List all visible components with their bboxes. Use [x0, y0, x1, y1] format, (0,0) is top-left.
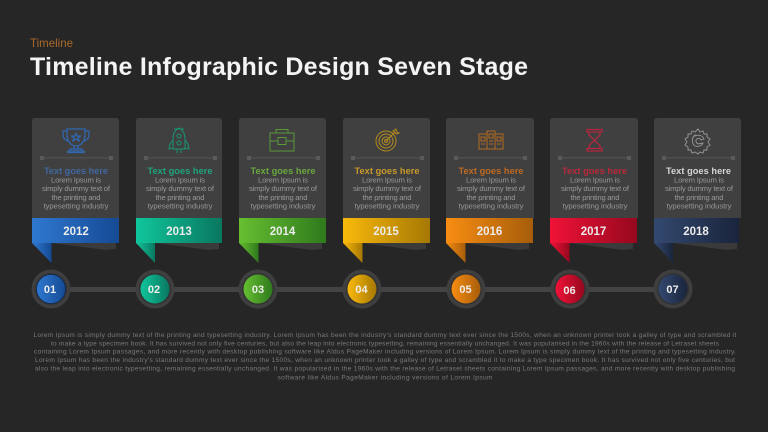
heading: Text goes here	[666, 166, 731, 176]
footer paragraph: software like Aldus PageMaker including versions of Lorem Ipsum	[278, 375, 493, 382]
stage 5: 2016	[446, 118, 534, 263]
body text: typesetting industry	[458, 202, 524, 210]
divider	[351, 156, 424, 160]
ribbon	[550, 218, 637, 243]
connector line	[51, 287, 673, 292]
ribbon shadow	[673, 243, 737, 250]
heading: Text goes here	[354, 166, 420, 176]
heading: Text goes here	[148, 166, 212, 176]
body text	[353, 176, 422, 210]
marker 05: 05	[459, 284, 472, 296]
card panel	[550, 118, 638, 218]
ribbon	[32, 218, 119, 243]
body text: simply dummy text of	[146, 184, 215, 193]
divider	[40, 156, 113, 160]
divider	[144, 156, 217, 160]
stage 4: 2015	[343, 118, 430, 263]
body text: the printing and	[674, 193, 724, 202]
ribbon	[136, 218, 222, 243]
year: 2017	[581, 226, 606, 238]
body text: Lorem Ipsum is	[674, 176, 724, 184]
card panel	[343, 118, 430, 218]
footer paragraph: Lorem Ipsum is simply dummy text of the printing and typesetting industry. Lorem Ipsum has been the industry's standard dummy text ever since the 1500s, when an unknown printer took a galley of type and scrambled it	[34, 332, 737, 339]
ribbon	[446, 218, 533, 243]
marker 04	[342, 270, 382, 308]
icon: buildings	[479, 131, 503, 149]
ribbon tail	[32, 243, 52, 263]
body text: Lorem Ipsum is	[362, 176, 412, 184]
marker 03: 03	[252, 284, 264, 296]
body text	[42, 176, 111, 210]
ribbon	[239, 218, 326, 243]
body text: Lorem Ipsum is	[570, 176, 620, 184]
ribbon tail	[446, 243, 466, 263]
year: 2013	[166, 226, 192, 238]
body text	[665, 176, 734, 210]
body text	[561, 176, 630, 210]
ribbon tail	[343, 243, 362, 263]
body text: the printing and	[156, 193, 204, 202]
body text	[457, 176, 526, 210]
body text: typesetting industry	[148, 202, 213, 210]
card panel	[239, 118, 326, 218]
ribbon	[654, 218, 739, 243]
card panel	[136, 118, 222, 218]
ribbon	[343, 218, 430, 243]
body text: typesetting industry	[354, 202, 420, 210]
icon: gear and wrench	[685, 129, 710, 154]
year: 2016	[477, 226, 502, 238]
marker 02: 02	[148, 284, 160, 296]
body text: Lorem Ipsum is	[258, 176, 308, 184]
ribbon tail	[550, 243, 570, 263]
footer paragraph: to make a type specimen book. It has survived not only five centuries, but also the leap into electronic typesetting, remaining essentially unchanged. It was popularised in the 1960s with the release of Letraset sheets	[51, 340, 720, 347]
heading: Text goes here	[250, 166, 316, 176]
icon: briefcase	[270, 130, 294, 151]
stage 7: 2018	[654, 118, 741, 263]
marker 06	[550, 270, 590, 308]
body text: the printing and	[466, 193, 516, 202]
body text: typesetting industry	[666, 202, 732, 210]
divider	[454, 156, 527, 160]
heading: Text goes here	[44, 166, 108, 176]
divider	[247, 156, 320, 160]
marker 02	[136, 270, 174, 308]
body text: simply dummy text of	[42, 184, 111, 193]
marker 04: 04	[355, 284, 368, 296]
card panel	[32, 118, 119, 218]
body text: simply dummy text of	[457, 184, 526, 193]
body text: the printing and	[258, 193, 308, 202]
title: Timeline Infographic Design Seven Stage	[30, 53, 528, 81]
marker 06: 06	[563, 285, 576, 297]
year: 2014	[270, 226, 296, 238]
year: 2015	[373, 226, 399, 238]
ribbon shadow	[51, 243, 116, 250]
body text	[146, 176, 215, 210]
ribbon tail	[136, 243, 155, 263]
body text: simply dummy text of	[249, 184, 318, 193]
ribbon shadow	[258, 243, 322, 250]
marker 01	[32, 270, 70, 308]
footer paragraph: containing Lorem Ipsum passages, and more recently with desktop publishing software like Aldus PageMaker including versions of Lorem Ipsum. Lorem Ipsum is simply dummy text of the printing and typesetting industry.	[34, 349, 736, 356]
ribbon shadow	[465, 243, 529, 250]
marker 07	[654, 270, 692, 308]
ribbon tail	[239, 243, 258, 263]
ribbon shadow	[155, 243, 219, 250]
body text	[249, 176, 318, 210]
body text: Lorem Ipsum is	[51, 176, 101, 184]
body text: the printing and	[362, 193, 412, 202]
body text: simply dummy text of	[353, 184, 422, 193]
body text: typesetting industry	[562, 202, 628, 210]
body text: simply dummy text of	[665, 184, 734, 193]
stage 6: 2017	[550, 118, 638, 263]
footer paragraph: Lorem Ipsum has been the industry's standard dummy text ever since the 1500s, when an unknown printer took a galley of type and scrambled it to make a type specimen book. It has survived not only five centuries, but	[35, 357, 735, 364]
year: 2018	[683, 226, 709, 238]
body text: Lorem Ipsum is	[155, 176, 205, 184]
ribbon shadow	[362, 243, 426, 250]
body text: Lorem Ipsum is	[466, 176, 516, 184]
marker 03	[238, 270, 278, 308]
body text: the printing and	[570, 193, 620, 202]
divider	[558, 156, 631, 160]
icon: target	[376, 129, 399, 151]
ribbon shadow	[569, 243, 633, 250]
stage 3: 2014	[239, 118, 326, 263]
card panel	[654, 118, 741, 218]
footer paragraph	[34, 332, 737, 382]
footer paragraph: also the leap into electronic typesetting, remaining essentially unchanged. It was popularised in the 1960s with the release of Letraset sheets containing Lorem Ipsum passages, and more recently with desktop publishing	[35, 365, 735, 372]
marker 07: 07	[666, 284, 679, 296]
body text: the printing and	[52, 193, 100, 202]
body text: simply dummy text of	[561, 184, 630, 193]
heading: Text goes here	[562, 166, 627, 176]
year: 2012	[63, 226, 89, 238]
stage 2: 2013	[136, 118, 222, 263]
stage 1: 2012	[32, 118, 119, 263]
body text: typesetting industry	[250, 202, 316, 210]
heading: Text goes here	[458, 166, 524, 176]
icon: rocket	[169, 128, 189, 153]
subtitle: Timeline	[30, 36, 73, 50]
body text: typesetting industry	[44, 202, 109, 210]
card panel	[446, 118, 534, 218]
divider	[662, 156, 735, 160]
marker 05	[446, 270, 486, 308]
icon: hourglass	[587, 130, 602, 151]
ribbon tail	[654, 243, 673, 263]
icon: trophy	[63, 129, 89, 152]
marker 01: 01	[44, 284, 56, 296]
